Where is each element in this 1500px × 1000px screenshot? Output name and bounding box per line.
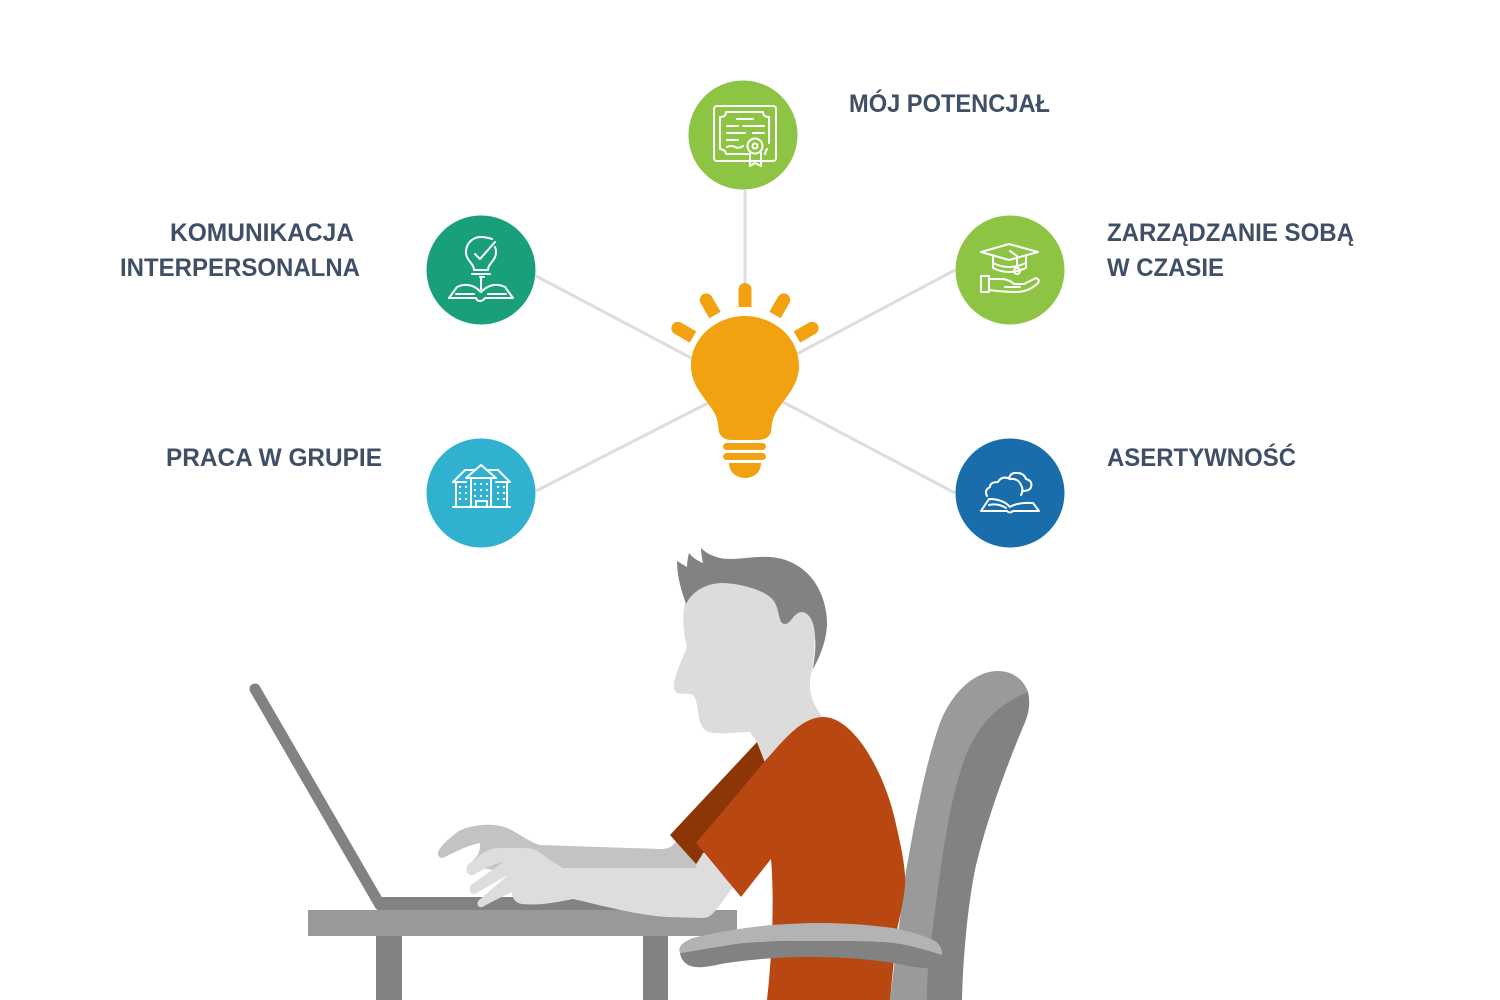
label: zarzadzanie soba w czasie: W CZASIE: [1107, 254, 1224, 282]
label: komunikacja interpersonalna: INTERPERSONALNA: [120, 254, 360, 282]
label: asertywnosc: ASERTYWNOŚĆ: [1107, 442, 1296, 472]
sleeve shadow: [670, 742, 766, 864]
label: zarzadzanie soba w czasie: [1107, 219, 1354, 282]
laptop and desk: [255, 689, 737, 1000]
armrest: [679, 923, 942, 968]
label: komunikacja interpersonalna: [120, 219, 360, 282]
front arm: [466, 848, 733, 918]
shirt: [696, 717, 905, 1000]
label: moj potencjal: MÓJ POTENCJAŁ: [849, 88, 1050, 118]
person: [438, 548, 942, 1000]
node: graduation cap and hand: [956, 216, 1064, 324]
node: certificate: [688, 80, 798, 190]
label: komunikacja interpersonalna: KOMUNIKACJA: [170, 219, 354, 247]
node: bulb over book: [426, 216, 536, 324]
label: praca w grupie: PRACA W GRUPIE: [166, 444, 382, 472]
icon: light bulb: [669, 283, 821, 478]
back arm: [438, 825, 700, 880]
head and neck: [674, 583, 825, 763]
chair back: [890, 671, 1029, 1000]
hair: [677, 548, 827, 669]
node: campus building: [426, 438, 536, 548]
label: zarzadzanie soba w czasie: ZARZĄDZANIE SOBĄ: [1107, 219, 1354, 247]
node: clouds over book: [956, 438, 1064, 548]
